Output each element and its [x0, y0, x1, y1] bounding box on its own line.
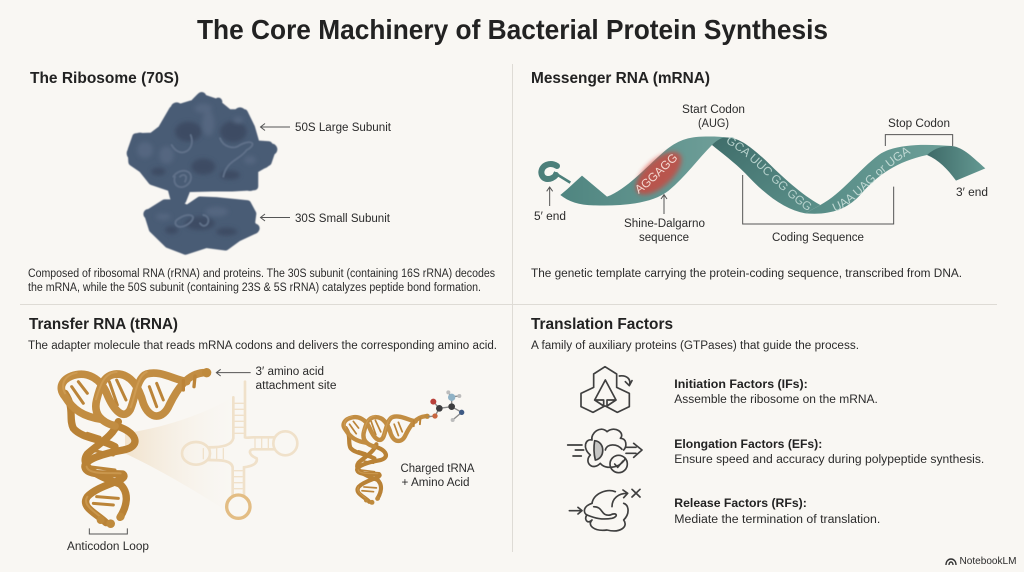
factor: elongation: Elongation Factors (EFs): [674, 437, 822, 451]
heading: mRNA: Messenger RNA (mRNA) [531, 70, 710, 87]
factor: elongation [674, 437, 984, 466]
labels: mRNA: 3′ end [956, 187, 988, 199]
labels: mRNA: Shine-Dalgarno [624, 218, 705, 230]
NotebookLM logo: NotebookLM [960, 555, 1016, 567]
panel: translation factors [531, 316, 984, 531]
projection cone [125, 397, 233, 513]
factor: release: Release Factors (RFs): [674, 496, 807, 510]
illustration: 70S ribosome [127, 92, 277, 254]
illustration: tRNA structures [61, 368, 464, 534]
icon: initiation factors [581, 367, 632, 412]
panel: mRNA [531, 70, 988, 280]
description: ribosome: Composed of ribosomal RNA (rRNA) and proteins. The 30S subunit (containing 16S rRNA) decodes [28, 268, 495, 280]
label: 50S: 50S Large Subunit [295, 122, 392, 134]
panel: ribosome [28, 70, 495, 294]
ribbon segments [560, 137, 985, 214]
ribbon sequence: stop: UAA UAG or UGA [832, 148, 911, 211]
labels: tRNA: + Amino Acid [402, 477, 470, 489]
description: mRNA: The genetic template carrying the protein-coding sequence, transcribed from DNA. [531, 268, 962, 280]
factor: release [674, 496, 880, 526]
factor: release: Mediate the termination of translation. [674, 514, 880, 526]
factor icons [568, 367, 642, 531]
labels: mRNA: Start Codon [682, 104, 745, 116]
labels: tRNA [67, 366, 475, 553]
labels: tRNA: attachment site [256, 380, 336, 392]
labels: mRNA: Stop Codon [888, 118, 950, 130]
labels: tRNA: Charged tRNA [400, 463, 475, 475]
labels: mRNA: sequence [639, 232, 689, 244]
labels: tRNA: Anticodon Loop [67, 541, 149, 553]
factor: initiation: Assemble the ribosome on the mRNA. [674, 394, 878, 406]
labels: mRNA [534, 104, 988, 244]
cloverleaf diagram [182, 382, 297, 518]
ribbon sequence: Shine-Dalgarno: AGGAGG [636, 154, 677, 194]
description: factors: A family of auxiliary proteins (GTPases) that guide the process. [531, 340, 859, 352]
5' cap [541, 164, 570, 183]
factor: elongation: Ensure speed and accuracy during polypeptide synthesis. [674, 454, 984, 466]
icon: elongation factors [568, 429, 642, 473]
illustration: mRNA ribbon [538, 134, 986, 224]
panel: tRNA [28, 316, 497, 553]
heading: ribosome: The Ribosome (70S) [30, 70, 179, 87]
labels: mRNA: (AUG) [698, 118, 729, 130]
arrow: to 30S [260, 214, 290, 221]
arrow: to 50S [260, 124, 290, 130]
title: The Core Machinery of Bacterial Protein Synthesis [197, 14, 828, 45]
labels: mRNA: 5′ end [534, 211, 566, 223]
description: ribosome [28, 268, 495, 294]
brackets and arrows [547, 135, 953, 224]
large tRNA 3D model [61, 368, 211, 528]
arrow and bracket [89, 369, 251, 534]
ribbon sequence: coding: GCA UUC GG GGG [727, 137, 812, 210]
heading: tRNA: Transfer RNA (tRNA) [29, 316, 178, 333]
description: tRNA: The adapter molecule that reads mRNA codons and delivers the corresponding amino acid. [28, 340, 497, 352]
description: ribosome: the mRNA, while the 50S subunit (containing 23S & 5S rRNA) catalyzes peptide bond formation. [28, 282, 481, 294]
amino acid molecule [428, 390, 464, 422]
heading: factors: Translation Factors [531, 316, 673, 333]
Shine-Dalgarno highlight [629, 144, 689, 202]
icon: release factors [569, 489, 640, 531]
labels: mRNA: Coding Sequence [772, 232, 864, 244]
factor: initiation: Initiation Factors (IFs): [674, 377, 808, 391]
small charged tRNA 3D model [344, 414, 430, 505]
labels: tRNA: 3′ amino acid [256, 366, 324, 378]
factor: initiation [674, 377, 878, 406]
label: 30S: 30S Small Subunit [295, 213, 391, 225]
